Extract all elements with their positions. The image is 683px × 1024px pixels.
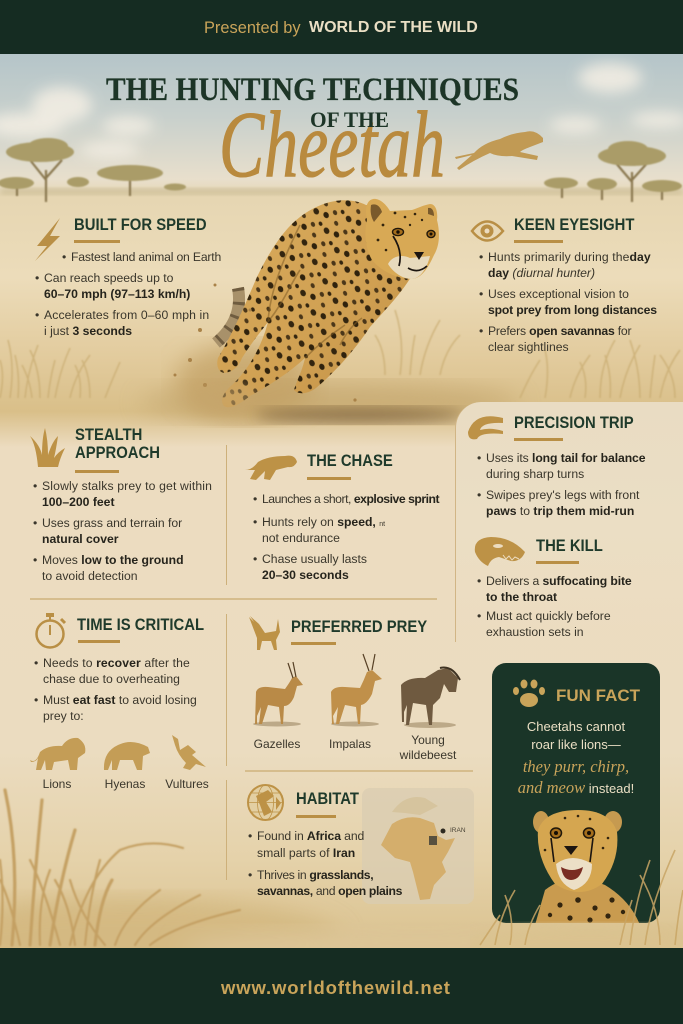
- top banner: [0, 0, 683, 54]
- bullets: 20–30 seconds: [262, 568, 349, 582]
- foreground grass around fun fact panel: [479, 850, 683, 948]
- bullets: Uses its long tail for balance: [486, 451, 645, 465]
- tail: [216, 288, 239, 343]
- bullets: [34, 656, 197, 723]
- fact text: roar like lions—: [531, 737, 621, 752]
- icon: grass: [30, 428, 65, 467]
- young wildebeest: [401, 668, 460, 728]
- title: THE HUNTING TECHNIQUES: [106, 72, 519, 108]
- panel: habitat: [247, 784, 474, 904]
- heading: HABITAT: [296, 790, 359, 808]
- heading: BUILT FOR SPEED: [74, 216, 207, 234]
- title: [106, 72, 543, 194]
- bullets: natural cover: [42, 532, 119, 546]
- icon: skull: [474, 537, 525, 566]
- panel: time is critical: [30, 613, 209, 791]
- bullets: Chase usually lasts: [262, 552, 367, 566]
- bullets: to the throat: [486, 590, 557, 604]
- predator labels: [43, 777, 209, 791]
- predator labels: Vultures: [165, 777, 209, 791]
- predator labels: Hyenas: [105, 777, 145, 791]
- icon: stopwatch: [35, 613, 66, 649]
- panel: preferred prey: [249, 616, 461, 762]
- foreground grass bottom left: [0, 790, 660, 982]
- bullets: [34, 479, 212, 583]
- bullets: exhaustion sets in: [486, 625, 584, 639]
- bullets: [254, 492, 440, 582]
- title: OF THE: [310, 107, 389, 132]
- bullets: Must eat fast to avoid losing: [43, 693, 197, 707]
- heading: APPROACH: [75, 444, 160, 462]
- bullets: Needs to recover after the: [43, 656, 190, 670]
- bullets: small parts of Iran: [257, 846, 355, 860]
- sub-panel: the kill: [474, 537, 632, 639]
- divider: habitat vertical: [226, 780, 227, 880]
- bullets: [478, 451, 646, 518]
- divider: horizontal: [30, 598, 437, 600]
- head: [365, 199, 439, 279]
- bullets: Fastest land animal on Earth: [71, 250, 221, 264]
- bullets: Accelerates from 0–60 mph in: [44, 308, 209, 322]
- savanna grass tufts: [0, 310, 680, 398]
- bullets: Hunts primarily during theday: [488, 250, 651, 264]
- prey labels: Gazelles: [254, 737, 300, 751]
- bullets: 100–200 feet: [42, 495, 115, 509]
- icon: eye: [470, 220, 504, 242]
- predator labels: Lions: [43, 777, 71, 791]
- fact text: and meow instead!: [518, 778, 634, 797]
- heading: PREFERRED PREY: [291, 618, 427, 636]
- fact text: [518, 719, 634, 797]
- prey labels: Impalas: [329, 737, 371, 751]
- world map panel: [362, 788, 474, 904]
- bullets: Uses exceptional vision to: [488, 287, 629, 301]
- heading: [75, 426, 160, 462]
- bullets: chase due to overheating: [43, 672, 180, 686]
- impala: [331, 654, 382, 726]
- heading: THE CHASE: [307, 452, 393, 470]
- dust and ground shadow: [140, 344, 520, 423]
- bullets: clear sightlines: [488, 340, 569, 354]
- top banner: WORLD OF THE WILD: [309, 19, 478, 36]
- bullets: not endurance: [262, 531, 340, 545]
- bullets: Found in Africa and: [257, 829, 364, 843]
- bullets: Thrives in grasslands,: [257, 868, 373, 882]
- prey animals: [253, 654, 461, 728]
- prey labels: Young: [411, 733, 445, 747]
- icon: lion, hyena and vulture silhouettes: [30, 735, 206, 770]
- bullets: Prefers open savannas for: [488, 324, 631, 338]
- bullets: Slowly stalks prey to get within: [42, 479, 212, 493]
- prey labels: [254, 733, 456, 762]
- presenter line: Presented by: [204, 19, 301, 37]
- bullets: prey to:: [43, 709, 84, 723]
- icon: paw: [513, 680, 545, 707]
- bullets: savannas, and open plains: [257, 884, 402, 898]
- clouds: [0, 63, 683, 158]
- icon: curved tail: [468, 416, 503, 440]
- icon: leaping cheetah silhouette: [455, 131, 543, 170]
- panel: built for speed: [35, 216, 221, 338]
- bullets: 60–70 mph (97–113 km/h): [44, 287, 190, 301]
- bullets: Delivers a suffocating bite: [486, 574, 632, 588]
- heading: KEEN EYESIGHT: [514, 216, 634, 234]
- bullets: during sharp turns: [486, 467, 584, 481]
- divider: upper vertical: [226, 445, 227, 585]
- hero illustration: running cheetah: [174, 198, 439, 407]
- panel: stealth approach: [30, 426, 212, 583]
- heading: STEALTH: [75, 426, 142, 444]
- bullets: Launches a short, explosive sprint: [262, 492, 439, 506]
- panel: keen eyesight: [470, 216, 657, 354]
- bullets: to avoid detection: [42, 569, 138, 583]
- cheetah cub portrait: [533, 810, 640, 923]
- fact text: they purr, chirp,: [523, 757, 629, 776]
- heading: THE KILL: [536, 537, 603, 555]
- bullets: [248, 829, 402, 898]
- bullets: [480, 250, 657, 354]
- website: www.worldofthewild.net: [221, 977, 451, 998]
- world map panel: IRAN: [450, 827, 466, 834]
- prey labels: wildebeest: [400, 748, 456, 762]
- heading: PRECISION TRIP: [514, 414, 634, 432]
- bullets: Moves low to the ground: [42, 553, 184, 567]
- panel: fun fact: [492, 663, 660, 923]
- icon: lightning bolt: [35, 218, 60, 261]
- bullets: [36, 250, 221, 338]
- divider: prey and habitat: [245, 770, 473, 772]
- bullets: [478, 574, 632, 639]
- presenter line: [204, 19, 478, 37]
- bullets: i just 3 seconds: [44, 324, 132, 338]
- bullets: spot prey from long distances: [488, 303, 657, 317]
- panel: the chase: [246, 452, 440, 582]
- bullets: Can reach speeds up to: [44, 271, 173, 285]
- fact text: Cheetahs cannot: [527, 719, 625, 734]
- icon: running cheetah: [246, 456, 297, 480]
- body and legs: [217, 200, 411, 407]
- bullets: paws to trip them mid-run: [486, 504, 634, 518]
- bullets: Swipes prey's legs with front: [486, 488, 639, 502]
- heading: FUN FACT: [556, 686, 640, 705]
- bullets: Uses grass and terrain for: [42, 516, 182, 530]
- gazelle: [253, 662, 303, 726]
- dust specks: [174, 284, 357, 402]
- icon: globe: [247, 784, 284, 821]
- title: Cheetah: [219, 93, 445, 194]
- bullets: Hunts rely on speed, nt: [262, 515, 385, 529]
- acacia trees: [0, 138, 683, 202]
- panel: precision trip and the kill: [455, 402, 683, 642]
- bullets: day (diurnal hunter): [488, 266, 595, 280]
- bottom banner: [0, 948, 683, 1024]
- heading: TIME IS CRITICAL: [77, 616, 204, 634]
- icon: antelope: [249, 616, 280, 650]
- divider: lower vertical: [226, 614, 227, 766]
- bullets: Must act quickly before: [486, 609, 611, 623]
